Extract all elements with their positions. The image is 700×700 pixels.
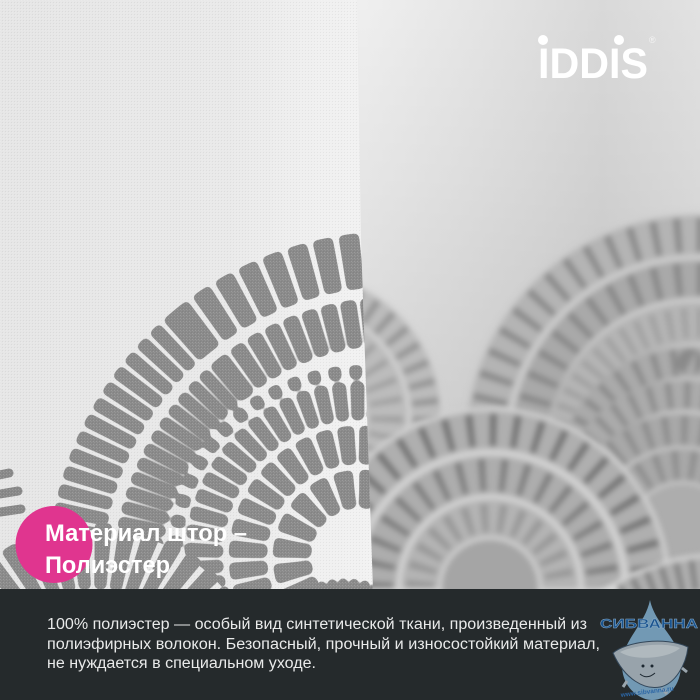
logo: IDDIS: ® — [649, 35, 656, 45]
logo url: www.sibvanna.ru — [619, 686, 674, 699]
logo: IDDIS: IDDIS — [538, 40, 648, 88]
panel: sharp curtain fold — [0, 0, 373, 589]
far left fan petals — [0, 473, 21, 513]
heading: Полиэстер — [45, 552, 170, 579]
blurred fan pattern: bottom right fan — [589, 553, 700, 600]
body text: 100% полиэстер — особый вид синтетической ткани, произведенный из — [47, 616, 587, 633]
fabric weave texture — [0, 0, 380, 590]
main sharp fan pattern — [55, 234, 370, 589]
body text — [47, 616, 600, 672]
body text: не нуждается в специальном уходе. — [47, 655, 316, 672]
lower center fan pattern — [317, 578, 373, 589]
heading: Материал штор – — [45, 520, 247, 547]
body text: полиэфирных волокон. Безопасный, прочный и износостойкий материал, — [47, 636, 600, 653]
bottom dark bar — [0, 589, 700, 700]
watermark logo: Sibvanna — [600, 600, 699, 700]
blurred fan pattern: front center fan — [309, 407, 671, 612]
lower left fan pattern — [0, 523, 229, 589]
pink circle — [16, 506, 92, 583]
heading — [45, 520, 247, 579]
blurred fan pattern: large right fan — [463, 213, 700, 681]
logo wordmark: СИБВАННА — [600, 616, 699, 631]
icon: smiling bathtub — [613, 641, 688, 694]
icon: water drop — [622, 600, 681, 700]
blurred fan pattern: small left fan — [154, 272, 444, 562]
